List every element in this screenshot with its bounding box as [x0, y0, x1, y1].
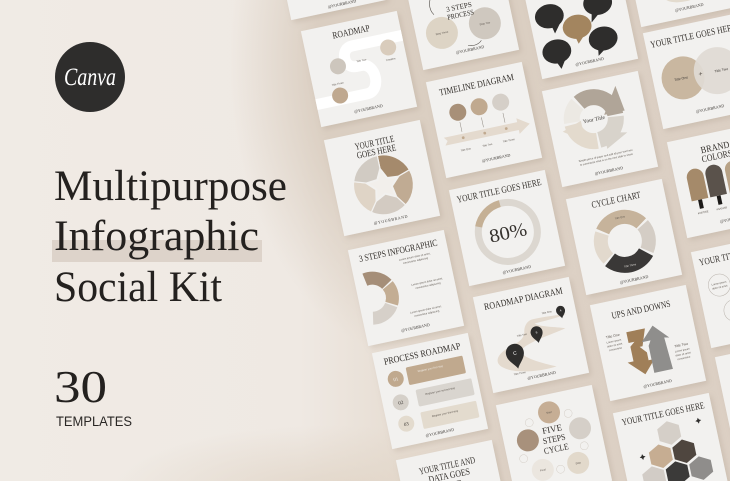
- card: star wheel: @YOURBRAND: [373, 213, 408, 226]
- roadmap stops: [323, 38, 405, 105]
- timeline labels: Title Two: [482, 142, 493, 148]
- segment labels: [613, 214, 637, 269]
- left text: consectetur: [609, 346, 623, 352]
- card: roadmap diagram: @YOURBRAND: [527, 370, 556, 381]
- step text: consectetur adipiscing: [403, 256, 429, 265]
- title: Infographic: [54, 213, 259, 260]
- center label: Your Title: [583, 115, 606, 125]
- card: arrow cycle: [542, 71, 658, 187]
- heading: CYCLE: [543, 441, 570, 456]
- card: cycle chart: @YOURBRAND: [619, 274, 649, 285]
- sparkles: [634, 417, 707, 461]
- description: Simple piece of paper and add all your text here: [578, 148, 634, 163]
- process rows: 02: [398, 401, 404, 407]
- process rows: 03: [404, 422, 410, 428]
- heading: ROADMAP: [332, 24, 371, 42]
- timeline markers: [462, 127, 508, 139]
- card: speech bubbles: @YOURBRAND: [575, 56, 604, 67]
- logo: Canva badge: [55, 42, 125, 112]
- heading: [418, 456, 481, 481]
- segment labels: Title Three: [624, 262, 637, 269]
- title: Social Kit: [54, 264, 222, 311]
- roadmap stops: Title Two: [356, 57, 367, 63]
- cycle circles: Start: [546, 410, 552, 415]
- right text: Title Two: [674, 342, 688, 349]
- cycle circles: [509, 394, 600, 481]
- heading: [699, 140, 730, 165]
- template count: [54, 361, 132, 429]
- left text: [605, 333, 624, 352]
- card: bottom right: [715, 337, 730, 453]
- card: ups and downs: [590, 285, 706, 401]
- ring segments: [596, 212, 653, 269]
- heading: UPS AND DOWNS: [611, 300, 672, 322]
- process rows: 01: [393, 377, 399, 383]
- pin labels: Title Three: [513, 370, 527, 376]
- card: roadmap diagram: [473, 277, 589, 393]
- heading: ROADMAP DIAGRAM: [483, 286, 564, 313]
- circle text: [711, 279, 728, 291]
- heading: [354, 135, 397, 162]
- card: hexagons: [613, 393, 729, 481]
- description: to summarize what is on the next slide to share: [580, 152, 634, 167]
- curved arrows: [427, 0, 482, 53]
- heading: STEPS: [542, 432, 566, 446]
- circle text: dolor sit amet: [712, 283, 728, 291]
- template count: 30: [54, 361, 107, 412]
- card: brand colors: [667, 122, 730, 238]
- right text: Lorem ipsum: [674, 347, 690, 354]
- card: ups and downs: @YOURBRAND: [643, 378, 672, 389]
- step text: Lorem ipsum dolor sit amet,: [410, 304, 442, 315]
- segment labels: Title One: [614, 214, 626, 220]
- heading: YOUR TITLE AND: [418, 456, 476, 478]
- title: [52, 163, 287, 311]
- card: 80 percent donut: [449, 170, 565, 286]
- donut value: 80%: [487, 219, 529, 248]
- card: circles list: [691, 232, 730, 348]
- step text: consectetur adipiscing: [414, 309, 440, 318]
- card: speech bubbles: [522, 0, 638, 79]
- card: your title and data: [396, 440, 512, 481]
- right text: dolor sit amet: [675, 350, 691, 358]
- timeline labels: Title Three: [502, 137, 516, 144]
- process rows: Register your first step: [417, 364, 444, 373]
- road: [306, 35, 412, 105]
- map pins: [498, 305, 575, 370]
- heading: GOES HERE: [356, 143, 397, 162]
- left text: Title One: [606, 333, 620, 340]
- popsicles: [685, 159, 730, 216]
- map pins: B: [535, 330, 538, 334]
- left text: Lorem ipsum: [606, 338, 622, 345]
- card: 3 steps process: @YOURBRAND: [455, 44, 485, 55]
- card: timeline diagram: @YOURBRAND: [481, 152, 511, 163]
- card: process roadmap: [372, 333, 488, 449]
- process rows: Register your second step: [425, 386, 456, 396]
- arrow ring: [568, 93, 620, 145]
- heading: PROCESS: [446, 7, 475, 22]
- pin labels: Title One: [541, 309, 553, 315]
- card: 3 steps infographic: [348, 230, 464, 346]
- logo: Canva badge: Canva: [64, 64, 116, 91]
- roadmap stops: Timeline: [385, 56, 396, 62]
- map pins: A: [559, 308, 562, 312]
- card: top right: @YOURBRAND: [674, 2, 704, 13]
- venn circles: [657, 43, 730, 105]
- brown down arrow: [621, 328, 657, 377]
- heading: 3 STEPS INFOGRAPHIC: [358, 239, 438, 265]
- venn circles: Title Two: [714, 67, 729, 74]
- map pins: C: [513, 350, 518, 357]
- venn circles: +: [698, 71, 703, 78]
- right text: consectetur: [677, 354, 691, 361]
- arrow heads: [556, 85, 632, 157]
- heading: FIVE: [541, 422, 563, 436]
- step text: Lorem ipsum dolor sit amet,: [399, 251, 431, 262]
- card: roadmap: [301, 11, 417, 127]
- star wheel chart: [348, 149, 419, 220]
- timeline circles: [448, 92, 513, 134]
- popsicles: #5A524B: [716, 205, 728, 211]
- card: cycle chart: [566, 179, 682, 295]
- heading: CYCLE CHART: [591, 191, 642, 211]
- heading: YOUR TITLE GOES HERE: [621, 401, 706, 428]
- card: star wheel: [324, 120, 440, 236]
- venn circles: Title One: [674, 75, 689, 82]
- bubbles: [532, 0, 624, 72]
- step text: consectetur adipiscing: [415, 281, 441, 290]
- heading: TIMELINE DIAGRAM: [439, 73, 515, 99]
- left text: dolor sit amet: [607, 341, 623, 349]
- process circles: Step Two: [479, 20, 491, 26]
- pin labels: [502, 309, 564, 376]
- template count: TEMPLATES: [56, 414, 132, 429]
- step text: [399, 250, 450, 319]
- card: venn diagram: [643, 13, 730, 129]
- heading: [539, 422, 570, 456]
- circle text: Lorem ipsum: [711, 280, 727, 287]
- timeline labels: Title One: [460, 146, 472, 152]
- pin labels: Title Two: [516, 332, 528, 338]
- winding road: [491, 312, 577, 379]
- timeline labels: [460, 137, 516, 152]
- process circles: [423, 4, 504, 52]
- donut chart: [473, 197, 543, 267]
- outline circles: [706, 270, 730, 325]
- gray up arrow: [639, 323, 676, 374]
- card: 3 steps process: [403, 0, 519, 70]
- timeline arrow: [443, 116, 531, 149]
- card: five steps cycle: [496, 385, 612, 481]
- card: venn diagram: @YOURBRAND: [695, 103, 725, 114]
- card: clipped top left: [271, 0, 387, 20]
- roadmap stops: Title Three: [331, 80, 345, 87]
- heading: YOUR TITLE GOES HERE: [456, 178, 543, 206]
- process circles: Step Three: [435, 30, 449, 36]
- process rows: [386, 355, 480, 434]
- card: roadmap: @YOURBRAND: [354, 103, 383, 114]
- cycle circles: Step: [575, 460, 582, 465]
- process rows: Register your third step: [431, 409, 459, 418]
- heading: YOUR TITLE: [354, 135, 395, 153]
- cycle circles: Final: [540, 467, 546, 472]
- card: 3 steps infographic: @YOURBRAND: [401, 322, 430, 333]
- card: top right: [621, 0, 730, 27]
- popsicles: #967D5E: [698, 209, 709, 215]
- title: Multipurpose: [54, 163, 287, 210]
- right text: [673, 342, 692, 361]
- half ring chart: [365, 274, 396, 319]
- hexagon cluster: [632, 414, 714, 481]
- card: arrow cycle: @YOURBRAND: [594, 165, 624, 176]
- step text: Lorem ipsum dolor sit amet,: [411, 276, 443, 287]
- card: 80 percent donut: @YOURBRAND: [502, 264, 532, 275]
- card: timeline diagram: [426, 62, 542, 178]
- partial ellipse: [663, 0, 705, 5]
- card: process roadmap: @YOURBRAND: [425, 427, 455, 438]
- heading: [445, 0, 475, 22]
- heading: PROCESS ROADMAP: [383, 342, 461, 368]
